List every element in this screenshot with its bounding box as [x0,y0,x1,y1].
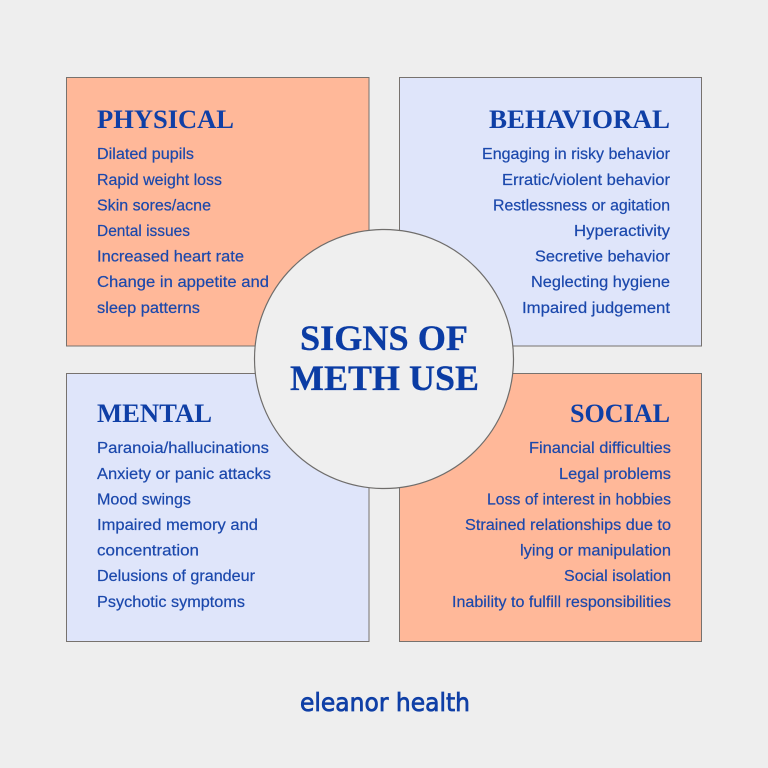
list: mental signs: Anxiety or panic attacks [97,466,271,483]
list: physical signs: Increased heart rate [97,249,244,266]
title [290,318,479,398]
list: physical signs: Rapid weight loss [97,172,222,189]
panel: mental [66,374,369,642]
heading: behavioral: BEHAVIORAL [489,105,670,134]
list: social signs: Inability to fulfill responsibilities [452,594,671,611]
list: social signs: Financial difficulties [529,440,671,457]
list: physical signs: Skin sores/acne [97,197,211,214]
list: behavioral signs: Impaired judgement [522,300,671,317]
list: mental signs: Psychotic symptoms [97,594,245,611]
list: mental signs: concentration [97,543,199,560]
logo: eleanor health: eleanor health [300,688,470,717]
list: social signs: lying or manipulation [520,543,671,560]
panel: behavioral [400,78,702,346]
panel: physical [66,78,369,346]
title: METH USE [290,358,479,398]
list: mental signs: Paranoia/hallucinations [97,440,269,457]
list: behavioral signs [482,146,671,317]
list: physical signs: Dental issues [97,223,190,240]
list: mental signs: Impaired memory and [97,517,258,534]
list: mental signs: Delusions of grandeur [97,568,255,585]
panel: social [400,374,702,642]
list: physical signs [97,146,269,317]
list: mental signs [97,440,271,611]
list: behavioral signs: Restlessness or agitation [493,197,670,214]
list: social signs: Legal problems [559,466,671,483]
list: social signs [452,440,671,611]
list: behavioral signs: Secretive behavior [535,249,670,266]
list: behavioral signs: Erratic/violent behavior [502,172,670,189]
heading: physical: PHYSICAL [97,105,234,134]
list: mental signs: Mood swings [97,491,191,508]
list: physical signs: Dilated pupils [97,146,194,163]
list: social signs: Social isolation [564,568,671,585]
list: physical signs: Change in appetite and [97,274,269,291]
title: SIGNS OF [300,318,468,358]
list: physical signs: sleep patterns [97,300,200,317]
list: social signs: Loss of interest in hobbies [487,491,671,508]
list: social signs: Strained relationships due to [465,517,671,534]
heading: social: SOCIAL [570,399,670,428]
list: behavioral signs: Engaging in risky behavior [482,146,670,163]
list: behavioral signs: Hyperactivity [574,223,670,240]
list: behavioral signs: Neglecting hygiene [531,274,670,291]
heading: mental: MENTAL [97,399,212,428]
center circle with title [254,230,514,488]
